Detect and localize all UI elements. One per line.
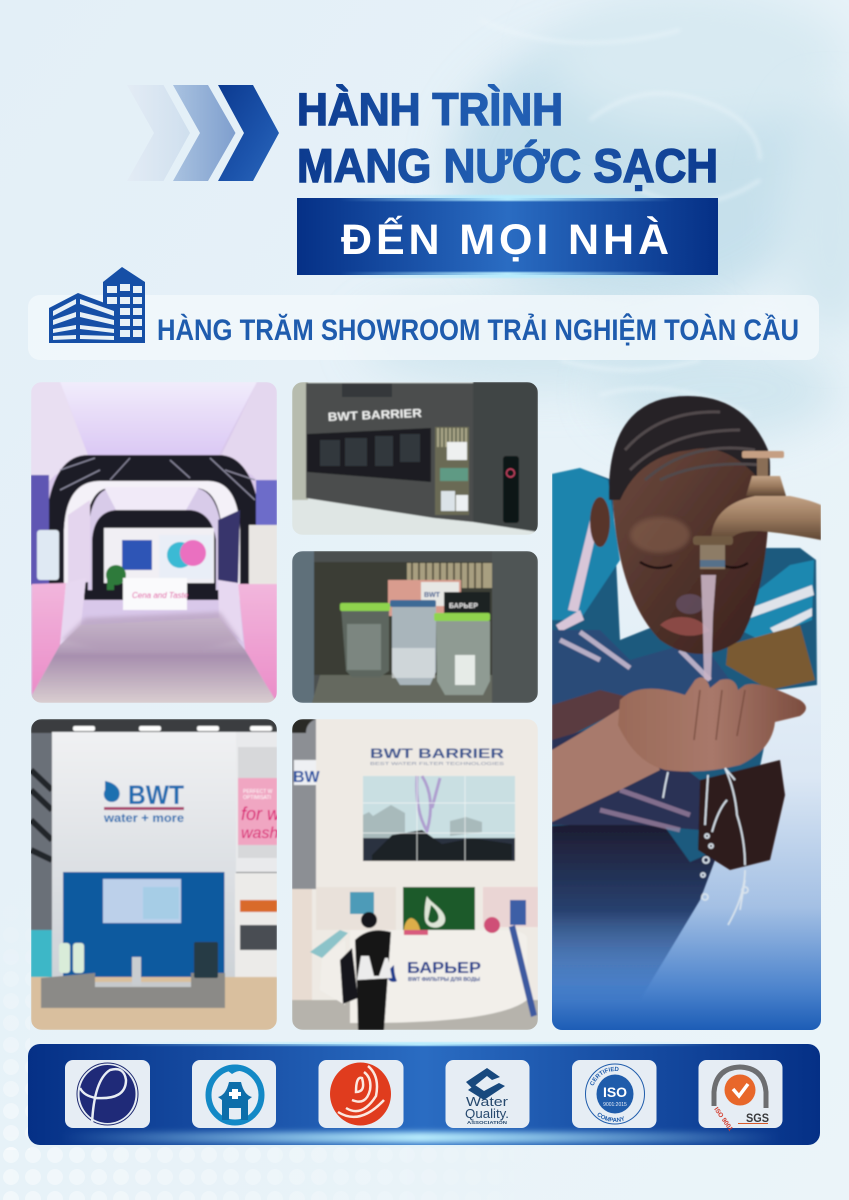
photo: BWT water + more booth: BWT xyxy=(128,780,184,810)
cupped hands xyxy=(618,677,806,772)
logo tile: SGS ISO 9001 xyxy=(698,1060,782,1133)
logo tile: SGS ISO 9001: ISO 9001 xyxy=(712,1106,734,1133)
arm xyxy=(552,705,660,822)
photo: BWT water + more booth: OPTIMISATI xyxy=(243,795,271,801)
banner: đến mọi nhà xyxy=(297,195,718,278)
splashing water xyxy=(663,768,748,925)
faucet xyxy=(693,451,821,569)
photo: BWT water + more booth: for wa xyxy=(241,804,290,824)
photo: child drinking from faucet xyxy=(552,396,821,1030)
logo tile: ISO 9001:2015 seal xyxy=(572,1060,656,1128)
logo tile: Water Quality Association: ASSOCIATION xyxy=(467,1120,507,1125)
logo tile: round P emblem xyxy=(65,1060,150,1128)
body fading into blue xyxy=(552,824,716,988)
photo: BWT Barrier reception booth: БАРЬЕР xyxy=(407,960,481,977)
ear xyxy=(590,497,610,547)
photo: BWT water + more booth: water + more xyxy=(103,811,184,825)
photo: BWT water + more booth: washi xyxy=(241,825,282,842)
title: two-line heading xyxy=(297,84,718,192)
logo bar xyxy=(28,1042,820,1146)
photo: BWT water + more booth: PERFECT W xyxy=(243,789,273,795)
logo tile: ISO 9001:2015 seal: CERTIFIED xyxy=(590,1066,619,1086)
face xyxy=(612,445,770,654)
subtitle pill: showroom xyxy=(28,295,819,360)
logo tile: ISO 9001:2015 seal: COMPANY xyxy=(598,1112,624,1122)
logo tile: SGS ISO 9001: SGS xyxy=(746,1111,769,1125)
banner: đến mọi nhà: ĐẾN MỌI NHÀ xyxy=(341,216,669,264)
photo: BWT Barrier dark showroom wall xyxy=(292,382,538,535)
shirt xyxy=(552,468,817,862)
photo: purple exhibition hall: Cena and Taste xyxy=(132,591,189,600)
hair xyxy=(609,396,770,500)
photo: water filter jugs on shelf: БАРЬЕР xyxy=(449,603,478,610)
photo: water filter jugs on shelf: BWT xyxy=(424,592,441,599)
logo tile: Water Quality Association: Water xyxy=(466,1094,509,1109)
photo: BWT Barrier reception booth: BEST WATER FILTER TECHNOLOGIES xyxy=(370,761,504,766)
logo tile: ISO 9001:2015 seal: ISO xyxy=(603,1084,627,1100)
water stream xyxy=(701,575,716,680)
logo tile: Water Quality Association xyxy=(446,1060,530,1128)
logo tile: Water Quality Association: Quality. xyxy=(465,1106,509,1121)
logo tile: ISO 9001:2015 seal: 9001:2015 xyxy=(603,1102,627,1108)
photo: BWT Barrier reception booth: BWT ФИЛЬТРЫ ДЛЯ ВОДЫ xyxy=(408,977,480,983)
photo: BWT Barrier reception booth: BWT BARRIER xyxy=(370,745,504,761)
photo: purple exhibition hall xyxy=(31,382,277,703)
logo tile: red fingerprint circle xyxy=(318,1060,404,1128)
logo tile: pagoda in blue ring xyxy=(192,1060,276,1128)
photo: BWT water + more booth xyxy=(31,719,290,1030)
title: two-line heading: MANG NƯỚC SẠCH xyxy=(297,139,718,192)
icon: three chevron arrows xyxy=(127,85,279,181)
photo: BWT Barrier dark showroom wall: BWT BARRIER xyxy=(328,406,422,424)
icon: buildings xyxy=(49,267,145,343)
photo: BWT Barrier reception booth: BW xyxy=(293,769,321,786)
photo: water filter jugs on shelf xyxy=(292,551,538,703)
title: two-line heading: HÀNH TRÌNH xyxy=(297,84,563,135)
photo: BWT Barrier reception booth xyxy=(292,719,538,1030)
